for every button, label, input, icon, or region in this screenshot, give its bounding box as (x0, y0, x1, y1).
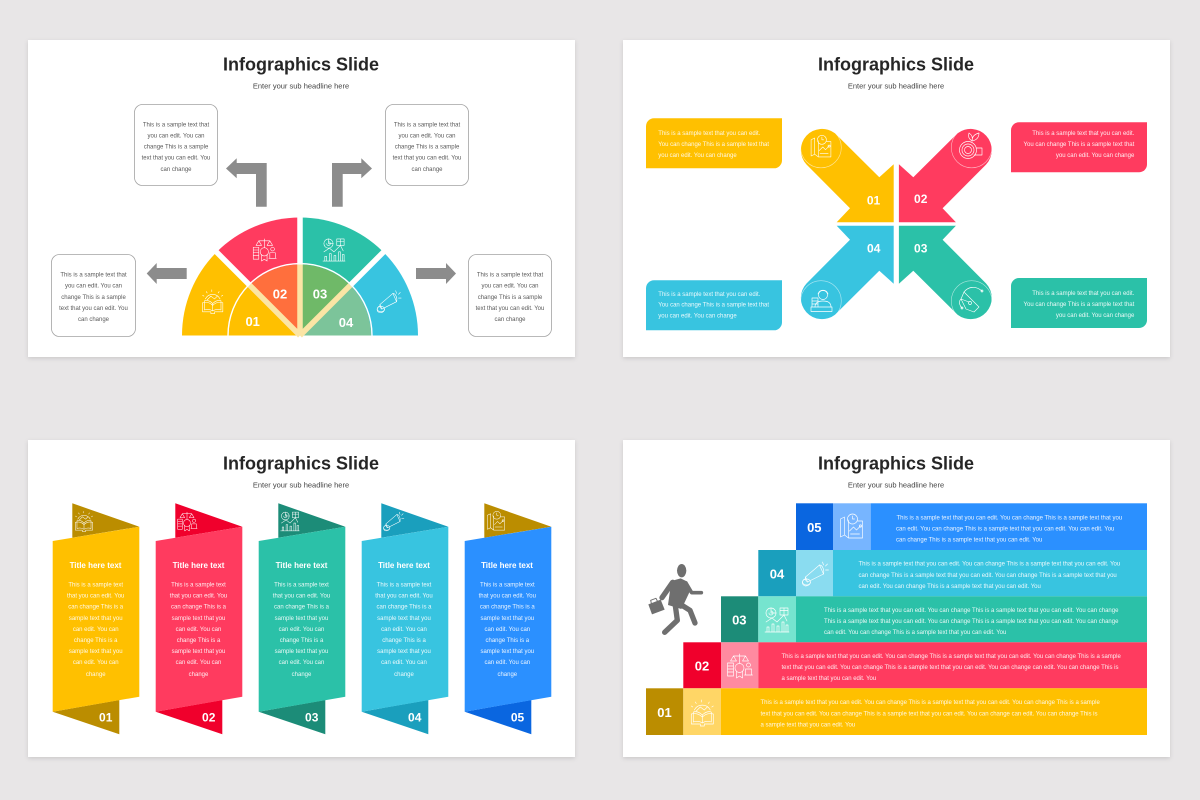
text box: right: This is a sample text that (477, 273, 544, 279)
arrow: left (147, 263, 187, 284)
text box: left: This is a sample text that (60, 273, 127, 279)
ribbon text: sample text that you (480, 649, 534, 655)
ribbon text: that you can edit. You (170, 594, 227, 600)
step text: a sample text that you can edit. You (782, 676, 876, 682)
icon: pen tool (959, 287, 983, 312)
number 03: 03 (732, 613, 747, 628)
step 03 (721, 596, 1147, 642)
semicircle chart (182, 212, 418, 336)
text box: top left: you can edit. You can (147, 133, 205, 139)
step 01 (646, 688, 1147, 735)
ribbon 04 (362, 503, 448, 734)
text box: right: text that you can edit. You (476, 306, 544, 312)
step text: can change This is a sample text that you can edit. You (896, 538, 1042, 544)
icon: chart (323, 239, 345, 261)
heading: Infographics Slide (818, 454, 974, 474)
heading: Infographics Slide (223, 454, 379, 474)
callout: teal: you can edit. You can change (1056, 313, 1135, 319)
step 05 (796, 503, 1147, 550)
subheading: Enter your sub headline here (848, 82, 944, 90)
arrow 01 (801, 127, 894, 222)
step 02 (683, 642, 1147, 688)
ribbon text: can change This is a (480, 605, 535, 611)
ribbon title: Title here text (276, 561, 328, 570)
text box: right: can change (494, 317, 526, 323)
text box: left: change This is a sample (61, 295, 126, 301)
icon: book (75, 511, 93, 532)
ribbon text: change (292, 672, 312, 678)
number 03: 03 (313, 287, 327, 302)
ribbon text: sample text that you (480, 616, 534, 622)
number 01: 01 (867, 193, 880, 207)
ribbon text: This is a sample text (480, 582, 535, 588)
ribbon text: change This is a (280, 638, 324, 644)
arrow: up-left (226, 158, 267, 207)
step text: This is a sample text that you can edit. You can change This is a sample text that you can edit. You can change (824, 608, 1119, 614)
ribbon text: that you can edit. You (273, 594, 330, 600)
ribbon text: change This is a (177, 638, 221, 644)
ribbon text: sample text that you (275, 616, 328, 622)
callout: blue: This is a sample text that you can edit. (658, 292, 761, 298)
text box: top left (134, 104, 218, 186)
icon: map clock (840, 514, 862, 538)
number 04: 04 (770, 566, 785, 581)
arrow: right (416, 263, 456, 284)
ribbon title: Title here text (70, 561, 122, 570)
icon: man at desk (811, 290, 832, 312)
number 03: 03 (305, 710, 319, 724)
text box: top left: change This is a sample (144, 144, 209, 150)
number 01: 01 (99, 710, 113, 724)
callout: red: This is a sample text that you can edit. (1032, 131, 1135, 137)
icon: chart (765, 608, 789, 632)
icon: book (691, 700, 713, 726)
icon: megaphone (384, 512, 404, 531)
ribbon text: that you can edit. You (67, 594, 124, 600)
callout: teal (1011, 278, 1147, 328)
icon: megaphone (802, 562, 828, 586)
text box: top right: text that you can edit. You (393, 156, 461, 162)
callout: yellow (646, 118, 782, 168)
number 03: 03 (914, 242, 928, 256)
callout: red: You can change This is a sample text that (1024, 142, 1135, 148)
ribbon text: can edit. You can (279, 627, 324, 633)
icon: scales (253, 239, 276, 261)
panel: staircase infographic (623, 440, 1170, 757)
ribbon text: change This is a (486, 638, 530, 644)
ribbon 02 (156, 503, 242, 734)
number 04: 04 (867, 242, 881, 256)
callout: yellow: This is a sample text that you can edit. (658, 131, 761, 137)
arrow 04 (801, 226, 894, 321)
ribbon text: that you can edit. You (375, 594, 433, 600)
ribbon text: This is a sample text (171, 582, 226, 588)
ribbon text: can edit. You can (381, 627, 427, 633)
step text: can edit. You can change This is a sample text that you can edit. You (824, 630, 1006, 636)
ribbon 01 (53, 503, 139, 734)
step text: can edit. You can change This is a sample text that you can edit. You can edit. You (896, 526, 1114, 532)
ribbon text: can edit. You can (484, 627, 530, 633)
text box: top right: can change (411, 167, 443, 173)
ribbon text: can change This is a (274, 605, 330, 611)
number 05: 05 (807, 520, 822, 535)
callout: teal: You can change This is a sample text that (1024, 302, 1135, 308)
ribbon text: change (394, 672, 415, 678)
ribbon text: change (497, 672, 518, 678)
ribbon text: change (86, 672, 106, 678)
icon: megaphone (377, 291, 401, 313)
step 04 (758, 550, 1147, 596)
step text: This is a sample text that you can edit. You can change This is a sample text that you can edit. You can change This is a sample (760, 700, 1100, 706)
text box: left: can change (78, 317, 110, 323)
number 02: 02 (273, 287, 287, 302)
ribbon text: sample text that you (377, 616, 431, 622)
subheading: Enter your sub headline here (253, 82, 349, 90)
panel: converging arrows infographic (623, 40, 1170, 357)
step text: This is a sample text that you can edit. You can change This is a sample text that you can edit. You (858, 562, 1120, 568)
ribbon 05 (465, 503, 551, 734)
text box: left: you can edit. You can (65, 284, 122, 290)
heading: Infographics Slide (223, 54, 379, 74)
ribbon text: can edit. You can (176, 660, 221, 666)
ribbon text: can edit. You can (484, 660, 530, 666)
step text: a sample text that you can edit. You (760, 722, 855, 728)
callout: red (1011, 122, 1147, 172)
ribbon text: can change This is a (377, 605, 432, 611)
ribbon text: can edit. You can (176, 627, 221, 633)
number 02: 02 (695, 659, 709, 674)
ribbon text: can edit. You can (381, 660, 427, 666)
subheading: Enter your sub headline here (253, 480, 349, 490)
text box: top left: text that you can edit. You (142, 156, 210, 162)
step text: text that you can edit. You can change This is a sample text that you can edit. You can change can edit. You can change This is (760, 711, 1098, 717)
icon: map clock (811, 135, 831, 157)
text box: top right: This is a sample text that (394, 122, 461, 128)
text box: right: you can edit. You can (481, 284, 539, 290)
ribbon text: change This is a (382, 638, 426, 644)
step text: This is a sample text that you can edit. You can change This is a sample text that you can edit. You can change This is a sample (782, 654, 1121, 660)
text box: top left: This is a sample text that (143, 122, 210, 128)
text box: top left: can change (160, 167, 192, 173)
ribbon text: sample text that you (377, 649, 431, 655)
step text: text that you can edit. You can change This is a sample text that you can edit. You can change can edit. You can change This is (782, 665, 1119, 671)
ribbon text: change This is a (74, 638, 118, 644)
ribbon text: can edit. You can (73, 660, 119, 666)
number 04: 04 (408, 710, 422, 724)
number 04: 04 (339, 315, 354, 330)
callout: blue: You can change This is a sample text that (658, 302, 769, 308)
ribbon 03 (259, 503, 345, 734)
subheading: Enter your sub headline here (848, 480, 944, 490)
text box: left (52, 254, 136, 336)
arrow: up-right (332, 158, 372, 207)
text box: right: change This is a sample (478, 295, 543, 301)
ribbon text: that you can edit. You (479, 594, 536, 600)
ribbon title: Title here text (481, 561, 533, 570)
icon: book (203, 290, 223, 314)
icon: chart (281, 512, 299, 531)
panel: semicircle infographic (28, 40, 575, 357)
number 01: 01 (245, 314, 260, 329)
step text: This is a sample text that you can edit. You can change This is a sample text that you can edit. You can change (824, 619, 1119, 625)
icon: scales (178, 512, 197, 531)
icon: coin with plant (960, 133, 982, 158)
step text: can change This is a sample text that you can edit. You can change This is a sample text that you (858, 573, 1117, 579)
ribbon text: sample text that you (172, 616, 225, 622)
ribbon title: Title here text (173, 561, 225, 570)
number 02: 02 (202, 710, 216, 724)
arrow 02 (899, 127, 992, 222)
text box: top right: change This is a sample (395, 144, 460, 150)
text box: right (468, 254, 552, 336)
ribbon text: sample text that you (172, 649, 225, 655)
number 02: 02 (914, 192, 928, 206)
ribbon title: Title here text (378, 561, 430, 570)
text box: top right (386, 104, 468, 186)
icon: scales (728, 654, 752, 678)
ribbon text: sample text that you (69, 649, 123, 655)
ribbon text: This is a sample text (68, 582, 123, 588)
text box: top right: you can edit. You can (398, 133, 456, 139)
ribbon text: can change This is a (68, 605, 124, 611)
ribbon text: This is a sample text (377, 582, 432, 588)
callout: blue (646, 280, 782, 330)
callout: teal: This is a sample text that you can edit. (1032, 291, 1135, 297)
ribbon text: sample text that you (275, 649, 328, 655)
callout: yellow: You can change This is a sample text that (658, 142, 769, 148)
callout: red: you can edit. You can change (1056, 153, 1135, 159)
number 05: 05 (511, 710, 524, 724)
heading: Infographics Slide (818, 54, 974, 74)
text box: left: text that you can edit. You (59, 306, 128, 312)
step text: This is a sample text that you can edit. You can change This is a sample text that you (896, 515, 1122, 521)
step text: can edit. You can change This is a sample text that you can edit. You (858, 584, 1041, 590)
ribbon text: can edit. You can (279, 660, 324, 666)
ribbon text: This is a sample text (274, 582, 329, 588)
callout: yellow: you can edit. You can change (658, 153, 737, 159)
callout: blue: you can edit. You can change (658, 314, 737, 320)
number 01: 01 (657, 705, 672, 720)
ribbon text: can edit. You can (73, 627, 119, 633)
arrow 03 (899, 226, 992, 321)
icon: running businessman (648, 564, 701, 632)
icon: map clock (487, 511, 505, 530)
ribbon text: can change This is a (171, 605, 227, 611)
panel: ribbon columns infographic (28, 440, 575, 757)
ribbon text: sample text that you (69, 616, 123, 622)
ribbon text: change (189, 672, 209, 678)
